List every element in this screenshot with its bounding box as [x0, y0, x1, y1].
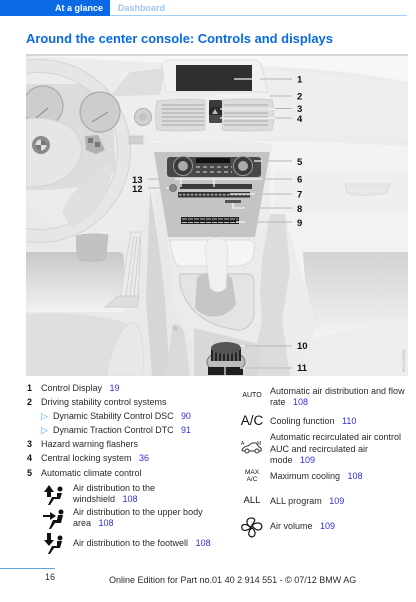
legend: right column — [240, 386, 405, 531]
callout numbers: 7 — [297, 190, 302, 200]
title: Around the center console: Controls and displays — [26, 31, 333, 46]
left footwell and pedals — [26, 200, 160, 376]
callout lines — [148, 79, 292, 368]
A/C text: Cooling function 110 — [270, 416, 356, 426]
header tab: At a glance: At a glance — [55, 3, 103, 13]
dashboard top — [26, 56, 408, 82]
MAX A/C icon: MAX — [245, 469, 259, 476]
windshield text: Air distribution to the — [73, 483, 155, 493]
footer rule — [0, 568, 55, 569]
wheel buttons — [85, 135, 105, 154]
upper body text: Air distribution to the upper body — [73, 507, 203, 517]
icon: windshield air — [44, 485, 62, 505]
callout numbers: 12 — [132, 184, 143, 195]
climate control unit — [167, 156, 261, 177]
AUTO text: Automatic air distribution and flow — [270, 386, 405, 396]
A/C icon: A/C — [241, 413, 263, 428]
bullet DTC: ▷ — [41, 425, 48, 435]
item 4: 4 — [27, 453, 32, 463]
callout numbers: 9 — [297, 218, 302, 229]
upper body text: area 108 — [73, 518, 114, 528]
gear boot and knob — [195, 272, 236, 317]
DTC text: Dynamic Traction Control DTC 91 — [53, 425, 191, 435]
iDrive base — [194, 328, 262, 376]
lower spoke — [62, 160, 112, 228]
callout numbers: 4 — [297, 114, 303, 125]
air volume text: Air volume 109 — [270, 521, 335, 531]
callout numbers: 2 — [297, 92, 302, 102]
callout numbers: 6 — [297, 174, 302, 186]
page number: 16 — [45, 572, 55, 582]
callout numbers: 3 — [297, 104, 302, 115]
steering wheel — [0, 60, 130, 242]
AUC text — [270, 432, 401, 465]
item 5 text: Automatic climate control — [41, 468, 142, 478]
callout numbers — [132, 74, 308, 374]
windshield text — [73, 483, 155, 504]
callout numbers: 10 — [297, 341, 308, 352]
icon: AUC car: A — [241, 441, 245, 447]
callout numbers: 8 — [297, 204, 302, 215]
MAX A/C icon — [245, 469, 259, 482]
left air vent — [156, 99, 205, 131]
windshield text: windshield 108 — [73, 494, 138, 504]
ALL text: ALL program 109 — [270, 496, 344, 506]
footer text: Online Edition for Part no.01 40 2 914 551 - © 07/12 BMW AG — [109, 575, 356, 585]
icon: upper body air — [43, 510, 64, 529]
dash lower right — [150, 141, 408, 214]
item 3: 3 — [27, 439, 32, 449]
AUTO icon: AUTO — [242, 392, 262, 399]
AUTO text: rate 108 — [270, 397, 308, 407]
item 3 text: Hazard warning flashers — [41, 439, 138, 449]
hub — [26, 118, 81, 187]
icon: AUC car — [241, 441, 262, 454]
icon: fan — [241, 517, 262, 538]
header tab: At a glance — [0, 0, 110, 16]
iDrive controller — [207, 342, 245, 375]
item 1 text: Control Display 19 — [41, 383, 120, 393]
right tunnel side and seat — [250, 214, 290, 376]
callout numbers: 1 — [297, 74, 303, 86]
AUC text: Automatic recirculated air control — [270, 432, 401, 442]
AUC text: mode 109 — [270, 455, 315, 465]
ALL icon: ALL — [244, 495, 260, 506]
light switch — [129, 136, 143, 144]
accelerator pedal — [120, 232, 141, 298]
BMW logo — [32, 136, 50, 154]
footwell text: Air distribution to the footwell 108 — [73, 538, 211, 548]
lower button strip — [181, 217, 239, 224]
icon: footwell air — [44, 533, 62, 554]
radio button row — [178, 192, 250, 198]
header tab: Dashboard: Dashboard — [118, 3, 165, 13]
center tunnel — [146, 190, 172, 376]
MAX A/C icon: A/C — [247, 476, 257, 482]
upper body text — [73, 507, 203, 528]
item 2: 2 — [27, 397, 32, 407]
illustration: car interior center console — [26, 54, 408, 376]
center vent buttons — [209, 100, 222, 123]
bullet DSC: ▷ — [41, 411, 48, 421]
ignition button — [134, 108, 152, 126]
item 2 text: Driving stability control systems — [41, 397, 167, 407]
right air vent — [222, 99, 274, 131]
header tab: Dashboard — [110, 0, 407, 16]
callout numbers: 5 — [297, 157, 303, 168]
CD slot — [180, 184, 252, 189]
shifter surround — [166, 230, 266, 376]
brake pedal — [93, 236, 99, 246]
item 1: 1 — [27, 383, 32, 393]
AUTO text — [270, 386, 405, 407]
control display — [162, 60, 268, 92]
AUC text: AUC and recirculated air — [270, 444, 368, 454]
callout numbers: 13 — [132, 175, 143, 186]
icon: AUC car: M — [257, 441, 261, 447]
DSC text: Dynamic Stability Control DSC 90 — [53, 411, 191, 421]
handbrake — [165, 325, 190, 376]
MAX text: Maximum cooling 108 — [270, 471, 363, 481]
legend: left column — [27, 383, 211, 548]
item 4 text: Central locking system 36 — [41, 453, 149, 463]
callout numbers: 11 — [297, 363, 308, 374]
image code: MV11C0260 — [401, 349, 406, 372]
center stack panel — [154, 152, 270, 237]
item 5: 5 — [27, 468, 32, 478]
instrument cluster — [23, 86, 63, 126]
